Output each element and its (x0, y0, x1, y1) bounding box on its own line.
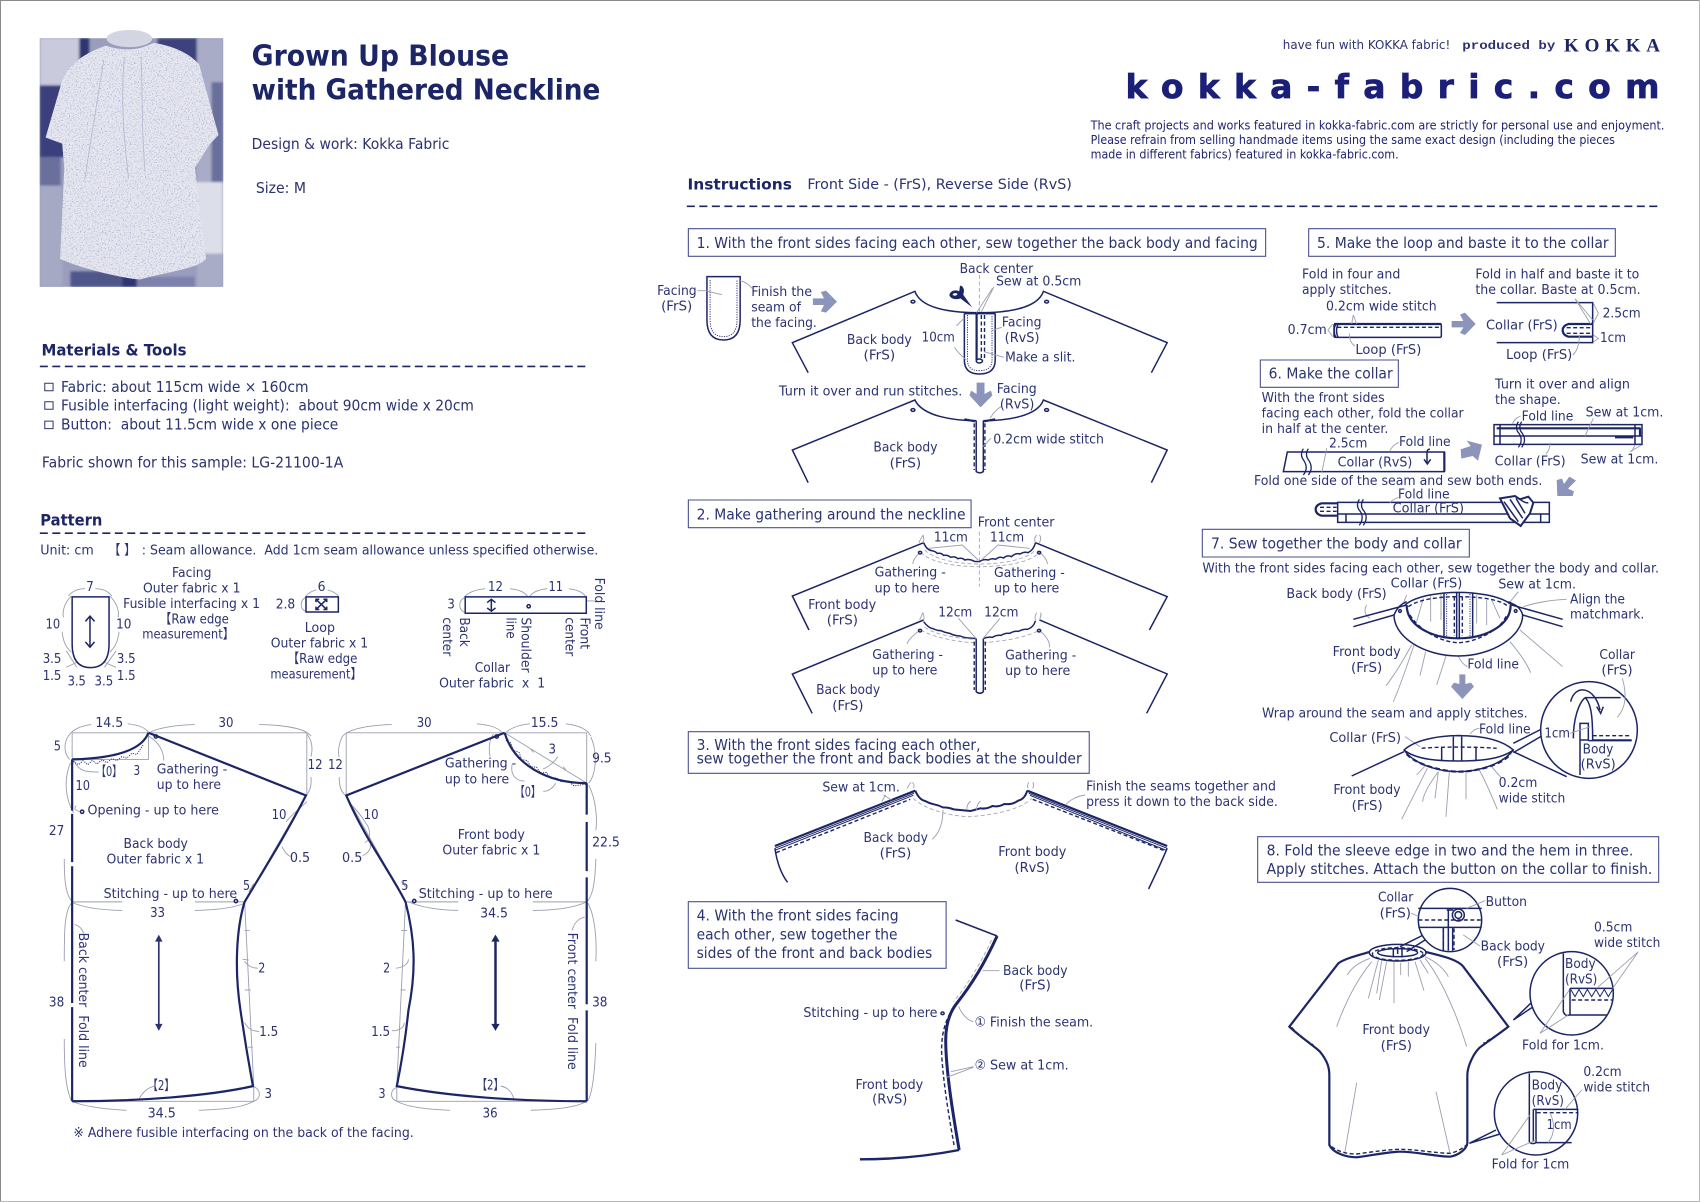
pattern piece: back body: 【2】 (148, 1078, 175, 1094)
pattern piece: collar: center (439, 617, 455, 657)
finished collar with iron: Collar (FrS) (1393, 501, 1464, 517)
pattern piece: back body: 【0】 (96, 764, 122, 780)
step 4 heading (688, 902, 946, 968)
back body with facing: 10cm (922, 329, 955, 345)
magnified hem detail: 1cm (1547, 1117, 1572, 1133)
pattern piece: back body: 3 (265, 1086, 272, 1102)
front body gathering (792, 514, 1167, 630)
side seam drawing: Stitching - up to here (803, 1004, 937, 1021)
pattern piece: back body: 5 (243, 878, 250, 894)
wrapped collar drawing: 0.2cm (1499, 775, 1537, 791)
magnified hem detail: Body (1532, 1077, 1562, 1093)
footnote: ※ Adhere fusible interfacing on the back of the facing. (73, 1125, 414, 1141)
pattern unit note (40, 543, 598, 558)
pattern piece: back body: 34.5 (148, 1106, 176, 1122)
pattern piece: facing: 1.5 (117, 668, 136, 684)
pattern piece: facing: measurement】 (142, 627, 234, 643)
back body after turning (792, 380, 1167, 483)
produced by: produced by (1462, 39, 1556, 53)
pattern piece: back body: Back center Fold line (75, 933, 91, 1068)
collar attach drawing: Fold line (1467, 656, 1519, 672)
pattern piece: front body: 12 (328, 757, 343, 773)
step 3 heading: 3. With the front sides facing each other, (697, 736, 981, 754)
pattern piece: front body: 【0】 (515, 785, 541, 801)
pattern piece: collar: Outer fabric x 1 (439, 676, 545, 692)
pattern piece: loop: Loop (305, 620, 335, 636)
back body with facing (792, 260, 1167, 374)
pattern piece: front body: 38 (592, 994, 607, 1010)
pattern piece: front body: Stitching - up to here (419, 886, 553, 902)
title (252, 40, 600, 107)
pattern piece: loop: 6 (318, 579, 325, 595)
pattern piece: front body: Front body (458, 827, 525, 843)
pattern piece: loop: 【Raw edge (287, 651, 357, 667)
pattern piece: back body: Opening - up to here (87, 803, 219, 819)
step 5 heading: 5. Make the loop and baste it to the collar (1317, 235, 1610, 252)
magnified sleeve detail: Fold for 1cm. (1522, 1037, 1604, 1053)
left header: photo, title, credits and materials (40, 30, 600, 558)
loop drawing: apply stitches. (1302, 282, 1392, 298)
brand header: Front Side - (FrS), Reverse Side (RvS) (807, 176, 1072, 193)
collar attach drawing: Align the (1570, 591, 1625, 607)
step 4 heading: sides of the front and back bodies (697, 944, 932, 962)
pattern piece: front body: 2 (383, 961, 390, 977)
pattern piece: front body: 5 (401, 878, 408, 894)
title: with Gathered Neckline (252, 74, 600, 107)
finished blouse: Front body (1362, 1022, 1430, 1038)
back body with facing: Back center (960, 260, 1034, 277)
shoulder seam drawing: Back body (863, 829, 928, 846)
pattern piece: back body (49, 715, 323, 1122)
collar with loop (1475, 266, 1641, 363)
back body with facing: (FrS) (864, 347, 895, 363)
step 6 heading (1260, 360, 1398, 387)
pattern piece: back body: Outer fabric x 1 (107, 851, 204, 867)
panel: pattern pieces (43, 565, 620, 1141)
step 8 heading (1258, 837, 1659, 882)
front body gathering: Gathering - (875, 564, 946, 580)
instruction: sew both ends: Fold one side of the seam and sew both ends. (1254, 473, 1542, 489)
pattern piece: facing: 3.5 (95, 673, 113, 689)
magnified hem detail: wide stitch (1583, 1080, 1650, 1096)
pattern piece: front body: Gathering - (445, 756, 516, 772)
heading: Instructions (687, 175, 1072, 193)
back body with facing: (RvS) (1005, 329, 1039, 346)
wrapped collar drawing: Front body (1333, 782, 1401, 798)
credits: design and size: Size: M (256, 179, 306, 197)
back body with facing: Make a slit. (1005, 349, 1075, 365)
magnified button detail: (FrS) (1380, 905, 1411, 921)
wrapped collar drawing: (FrS) (1352, 798, 1383, 814)
collar fold drawing: 2.5cm (1329, 436, 1367, 452)
collar attach drawing: Back body (FrS) (1286, 586, 1387, 602)
panel: step 7 (1202, 529, 1659, 819)
turned collar drawing: Collar (FrS) (1495, 453, 1566, 469)
pattern piece: back body: Stitching - up to here (104, 886, 237, 902)
step 2 heading: 2. Make gathering around the neckline (697, 505, 966, 523)
pattern piece: collar: 12 (488, 579, 503, 595)
magnified collar detail: 1cm (1544, 726, 1570, 742)
pattern piece: facing: 1.5 (43, 668, 61, 684)
panel: step 8 (1258, 837, 1660, 1172)
magnified button detail: Button (1486, 894, 1527, 910)
loop drawing: 0.2cm wide stitch (1326, 298, 1437, 314)
pattern piece: collar: 3 (447, 597, 455, 613)
pattern piece: collar: Front (576, 617, 593, 649)
pattern piece: facing: 3.5 (43, 651, 61, 667)
step 3 heading: sew together the front and back bodies at the shoulder (697, 750, 1082, 767)
step 2 heading (688, 500, 971, 528)
heading: Materials & Tools: Materials & Tools (41, 342, 187, 360)
pattern piece: back body: 10 (75, 778, 90, 794)
turned collar drawing: Fold line (1522, 409, 1573, 425)
pattern unit note: 【 】 (109, 543, 136, 558)
pattern piece: front body: up to here (445, 772, 509, 788)
back body after turning: Facing (997, 380, 1037, 397)
magnified sleeve detail: Body (1565, 956, 1596, 972)
materials list: Button: about 11.5cm wide x one piece (61, 416, 338, 433)
pattern piece: front body: Outer fabric x 1 (442, 842, 540, 858)
collar with loop: 2.5cm (1603, 306, 1641, 322)
step 7 heading (1202, 529, 1469, 557)
pattern piece: loop: 2.8 (276, 597, 295, 613)
instruction: wrap around: Wrap around the seam and apply stitches. (1262, 706, 1528, 722)
icon: scissors (949, 286, 972, 307)
pattern piece: back body: 14.5 (95, 715, 123, 731)
step 8 heading: Apply stitches. Attach the button on the collar to finish. (1267, 861, 1652, 878)
pattern piece: collar: Back (456, 617, 472, 647)
arrow (1452, 313, 1476, 335)
side seam drawing: (FrS) (1019, 977, 1051, 993)
pattern piece: back body: 10 (272, 807, 287, 823)
facing piece: Facing (657, 282, 697, 299)
back body gathering (792, 604, 1167, 714)
loop drawing: 0.7cm (1288, 322, 1327, 338)
pattern piece: front body: 22.5 (592, 835, 620, 851)
magnified sleeve detail: wide stitch (1594, 935, 1660, 951)
brand header (687, 38, 1665, 206)
photo: blouse on mannequin (40, 30, 223, 287)
finished blouse (1289, 944, 1508, 1157)
back body after turning: Back body (873, 439, 938, 455)
pattern piece: loop: Outer fabric x 1 (271, 636, 368, 652)
step 5 heading (1309, 229, 1615, 256)
side seam drawing: Back body (1003, 962, 1068, 979)
pattern piece: front body (328, 715, 620, 1122)
magnified hem detail (1469, 1064, 1650, 1172)
pattern piece: front body: 3 (379, 1086, 386, 1102)
pattern piece: collar: line (503, 617, 519, 639)
collar fold drawing: With the front sides (1262, 390, 1385, 406)
front body gathering: up to here (994, 580, 1059, 596)
pattern piece: front body: 3 (549, 742, 556, 758)
magnified sleeve detail: (RvS) (1565, 972, 1597, 988)
magnified collar detail: (FrS) (1601, 663, 1633, 679)
front body gathering: Front center (978, 514, 1055, 530)
heading: Instructions: Instructions (687, 175, 792, 193)
step 4 heading: 4. With the front sides facing (697, 907, 899, 924)
collar attach drawing (1286, 575, 1644, 702)
finished collar with iron (1316, 486, 1549, 526)
back body gathering: up to here (1005, 662, 1070, 679)
arrow (813, 291, 837, 313)
fabric sample note: Fabric shown for this sample: LG-21100-1A (42, 454, 343, 471)
step 7 intro: With the front sides facing each other, sew together the body and collar. (1202, 560, 1659, 576)
magnified button detail: Collar (1378, 890, 1414, 906)
pattern piece: collar: 11 (549, 579, 563, 595)
pattern piece: back body: 0.5 (290, 850, 310, 866)
brand header: have fun with KOKKA fabric! (1283, 38, 1450, 52)
pattern piece: front body: 10 (364, 807, 379, 823)
back body gathering: up to here (872, 662, 937, 678)
pattern piece: front body: 9.5 (592, 751, 612, 767)
back body with facing: Back body (847, 331, 912, 348)
side seam drawing: (RvS) (872, 1091, 907, 1107)
shoulder seam drawing: Finish the seams together and (1086, 778, 1276, 794)
arrow (1451, 674, 1474, 699)
front body gathering: (FrS) (827, 612, 858, 628)
wrapped collar drawing: Fold line (1479, 721, 1531, 737)
facing piece: the facing. (751, 314, 817, 331)
collar with loop: Fold in half and baste it to (1475, 266, 1639, 282)
finished collar with iron: Fold line (1398, 486, 1450, 502)
collar with loop: 1cm (1600, 330, 1626, 346)
pattern piece: collar: Fold line (591, 578, 607, 630)
pattern piece: facing: Fusible interfacing x 1 (123, 596, 260, 612)
credits: design and size: Design & work: Kokka Fabric (252, 135, 449, 153)
back body after turning: (RvS) (1000, 396, 1034, 412)
facing piece: Finish the (751, 283, 812, 300)
facing piece: (FrS) (661, 298, 692, 314)
pattern piece: front body: 【2】 (477, 1077, 504, 1093)
pattern piece: loop (270, 579, 368, 683)
pattern piece: front body: 15.5 (531, 715, 559, 731)
back body gathering: 12cm (984, 604, 1019, 620)
wrapped collar drawing (1329, 721, 1567, 819)
facing piece (657, 277, 817, 340)
materials list: Fusible interfacing (light weight): about 90cm wide x 20cm (61, 397, 474, 414)
shoulder seam drawing: (FrS) (880, 845, 911, 861)
turned collar drawing: the shape. (1495, 392, 1561, 408)
magnified sleeve detail (1513, 919, 1660, 1053)
magnified button detail: (FrS) (1497, 954, 1528, 970)
magnified collar detail: (RvS) (1581, 757, 1616, 773)
magnified hem detail: 0.2cm (1583, 1064, 1622, 1080)
pattern unit note: Unit: cm (40, 543, 94, 558)
pattern piece: back body: 12 (308, 757, 323, 773)
panel: steps 3 and 4 (688, 732, 1278, 1159)
pattern piece: facing: 【Raw edge (160, 612, 229, 627)
pattern piece: back body: 2 (258, 961, 265, 977)
pattern piece: front body: 0.5 (342, 850, 362, 866)
facing piece: seam of (751, 299, 802, 315)
logo: kokka-fabric.com: kokka-fabric.com (1126, 67, 1660, 106)
collar fold drawing: Collar (RvS) (1338, 454, 1412, 470)
collar attach drawing: Sew at 1cm. (1498, 576, 1576, 592)
back body after turning: (FrS) (890, 455, 921, 471)
pattern piece: collar (439, 578, 607, 692)
pattern piece: front body: 1.5 (371, 1024, 390, 1040)
turned collar drawing: Sew at 1cm. (1586, 405, 1663, 421)
collar attach drawing: Front body (1333, 644, 1401, 660)
shoulder seam drawing: press it down to the back side. (1086, 793, 1278, 810)
pattern unit note: : Seam allowance. Add 1cm seam allowance unless specified otherwise. (142, 543, 598, 558)
shoulder seam drawing: Front body (998, 843, 1066, 860)
loop drawing (1288, 266, 1441, 358)
pattern piece: front body: 36 (483, 1106, 498, 1122)
title: Grown Up Blouse (252, 40, 509, 73)
step 6 heading: 6. Make the collar (1269, 366, 1394, 383)
magnified collar detail: Collar (1599, 647, 1635, 663)
side seam drawing: Front body (856, 1076, 923, 1093)
turned collar drawing: Turn it over and align (1494, 376, 1630, 392)
pattern piece: facing: 3.5 (68, 673, 86, 689)
finished blouse: (FrS) (1381, 1038, 1412, 1054)
arrow (969, 383, 992, 407)
back body after turning: 0.2cm wide stitch (993, 431, 1104, 447)
step 4 heading: each other, sew together the (697, 926, 898, 943)
collar fold drawing: facing each other, fold the collar (1262, 405, 1464, 421)
magnified button detail: Back body (1481, 938, 1545, 954)
step 1 heading (688, 229, 1266, 256)
collar with loop: the collar. Baste at 0.5cm. (1475, 282, 1641, 298)
collar with loop: Collar (FrS) (1486, 318, 1558, 334)
pattern piece: collar: Collar (475, 660, 510, 676)
pattern piece: front body: 34.5 (480, 906, 508, 921)
arrow (1461, 441, 1482, 461)
step 3 heading (688, 732, 1089, 773)
materials list (45, 378, 474, 433)
magnified collar detail (1541, 647, 1637, 778)
pattern piece: facing: 3.5 (117, 651, 136, 667)
credits: design and size (252, 135, 449, 197)
notice text (1090, 119, 1665, 161)
instruction: turn over: Turn it over and run stitches. (778, 383, 962, 399)
pattern piece: back body: 30 (219, 715, 233, 731)
shoulder seam drawing (775, 778, 1278, 889)
back body with facing: Facing (1002, 314, 1041, 330)
collar attach drawing: (FrS) (1351, 660, 1382, 676)
pattern piece: back body: up to here (157, 777, 221, 793)
side seam drawing (803, 920, 1093, 1159)
back body gathering: 12cm (938, 604, 972, 620)
collar with loop: Loop (FrS) (1506, 347, 1572, 363)
pattern piece: back body: 3 (134, 763, 140, 779)
back body gathering: Gathering - (872, 646, 943, 663)
pattern piece: collar: center (562, 617, 578, 657)
arrow (1557, 477, 1576, 496)
magnified hem detail: (RvS) (1532, 1093, 1564, 1109)
magnified collar detail: Body (1583, 741, 1613, 757)
loop drawing: Loop (FrS) (1355, 342, 1421, 358)
materials list: Fabric: about 115cm wide × 160cm (61, 378, 308, 395)
magnified button detail (1378, 888, 1545, 970)
front body gathering: 11cm (990, 529, 1024, 545)
step 7 heading: 7. Sew together the body and collar (1211, 535, 1463, 552)
brand mark: KOKKA: KOKKA (1564, 36, 1660, 56)
collar attach drawing: matchmark. (1570, 607, 1644, 623)
pattern piece: back body: 38 (49, 994, 64, 1010)
shoulder seam drawing: Sew at 1cm. (822, 779, 900, 795)
pattern piece: collar: Shoulder (518, 617, 534, 673)
collar fold drawing (1262, 390, 1464, 475)
pattern piece: back body: 33 (150, 905, 165, 921)
magnified hem detail: Fold for 1cm (1492, 1156, 1569, 1172)
step 8 heading: 8. Fold the sleeve edge in two and the hem in three. (1267, 842, 1633, 859)
pattern piece: front body: Front center Fold line (564, 933, 580, 1070)
collar attach drawing: Collar (FrS) (1391, 575, 1462, 591)
pattern piece: loop: measurement】 (270, 667, 362, 683)
pattern piece: back body: Gathering - (157, 761, 227, 777)
back body gathering: Back body (816, 681, 880, 698)
pattern piece: back body: 5 (54, 738, 61, 754)
back body with facing: Sew at 0.5cm (996, 273, 1081, 289)
pattern piece: facing: Outer fabric x 1 (143, 580, 240, 596)
wrapped collar drawing: Collar (FrS) (1329, 730, 1401, 746)
collar fold drawing: in half at the center. (1262, 421, 1388, 437)
pattern piece: back body: 27 (49, 823, 64, 839)
front body gathering: Gathering - (994, 564, 1065, 581)
turned collar drawing: Sew at 1cm. (1581, 451, 1658, 467)
pattern piece: back body: 1.5 (259, 1024, 278, 1040)
turned collar drawing (1494, 376, 1663, 469)
step 1 heading: 1. With the front sides facing each other, sew together the back body and facing (697, 233, 1258, 252)
pattern piece: facing: 7 (86, 579, 94, 595)
side seam drawing: ① Finish the seam. (975, 1014, 1093, 1030)
pattern piece: back body: Back body (124, 836, 188, 852)
front body gathering: Front body (808, 596, 876, 613)
pattern piece: facing (43, 565, 260, 689)
panel: steps 5 and 6 (1254, 229, 1663, 526)
pattern piece: facing: 10 (46, 616, 60, 632)
front body gathering: 11cm (934, 529, 968, 545)
pattern piece: facing: Facing (172, 565, 211, 581)
shoulder seam drawing: (RvS) (1015, 859, 1050, 876)
pattern piece: front body: 30 (417, 715, 432, 731)
pattern piece: facing: 10 (116, 616, 131, 632)
heading: Pattern: Pattern (40, 512, 102, 530)
back body gathering: (FrS) (832, 697, 864, 714)
loop drawing: Fold in four and (1302, 266, 1400, 282)
front body gathering: up to here (875, 580, 940, 596)
back body gathering: Gathering - (1005, 647, 1076, 663)
panel: steps 1 and 2 (657, 229, 1266, 714)
side seam drawing: ② Sew at 1cm. (975, 1057, 1069, 1073)
wrapped collar drawing: wide stitch (1499, 791, 1565, 807)
collar fold drawing: Fold line (1399, 434, 1451, 450)
magnified sleeve detail: 0.5cm (1594, 919, 1632, 935)
